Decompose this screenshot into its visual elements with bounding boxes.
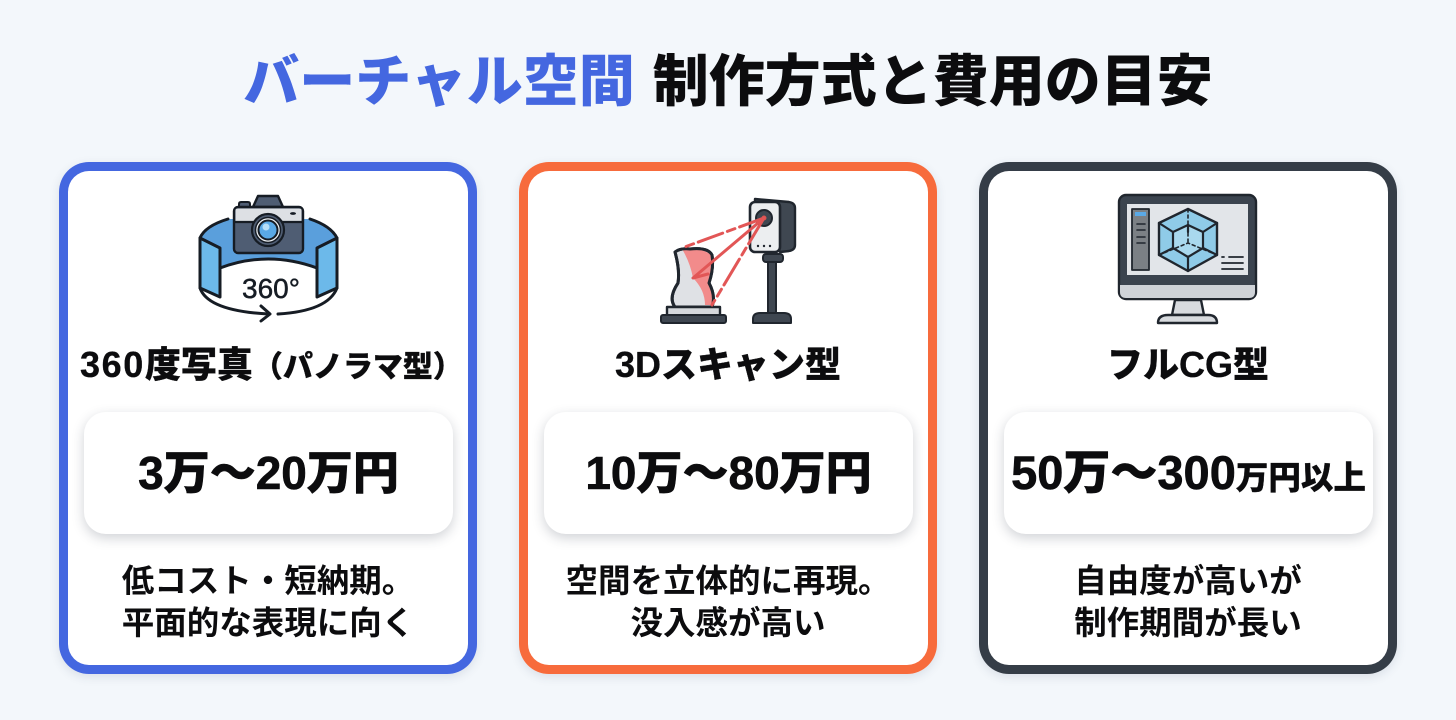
panel: 360 photo: [59, 162, 477, 674]
price box: [1004, 412, 1373, 534]
description: 自由度が高いが: [1074, 563, 1302, 599]
description: 没入感が高い: [630, 605, 826, 641]
price box: 3万〜20万円: [138, 447, 399, 499]
price box: [84, 412, 453, 534]
description: [1074, 563, 1302, 641]
heading: フルCG型: [1107, 344, 1269, 385]
icon: 360 camera: [198, 194, 339, 323]
panel: full CG: [979, 162, 1397, 674]
heading: 3Dスキャン型: [615, 344, 841, 385]
icon: CG monitor: [1118, 194, 1258, 324]
heading: 360度写真（パノラマ型）: [80, 344, 463, 385]
description: 制作期間が長い: [1074, 605, 1302, 641]
description: [565, 563, 890, 641]
description: 平面的な表現に向く: [122, 605, 414, 641]
price box: 10万〜80万円: [585, 447, 872, 499]
panel: 3D scan: [519, 162, 937, 674]
price box: 50万〜300万円以上: [1011, 446, 1366, 499]
icon: 360 camera: 360°: [242, 273, 300, 304]
description: [122, 563, 414, 641]
title: バーチャル空間 制作方式と費用の目安: [243, 50, 1213, 113]
icon: 3D scanner: [660, 198, 796, 324]
price box: [544, 412, 913, 534]
description: 空間を立体的に再現。: [565, 563, 890, 599]
description: 低コスト・短納期。: [122, 563, 414, 599]
